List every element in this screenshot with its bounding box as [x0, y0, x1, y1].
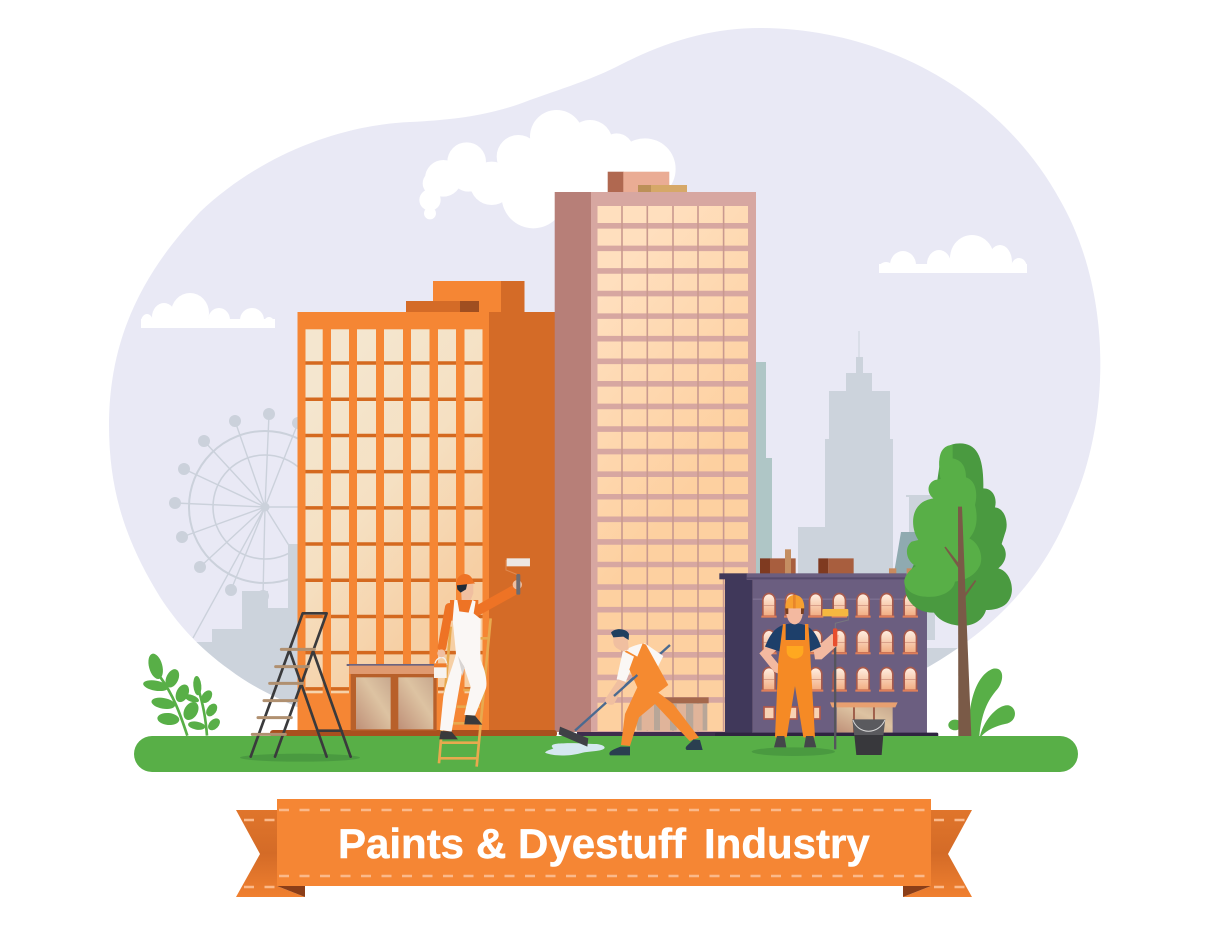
boots — [774, 736, 816, 747]
broom hand overlap handle — [614, 675, 637, 696]
background blob — [109, 28, 1100, 707]
purple building — [715, 549, 938, 737]
building: low grey right — [927, 648, 958, 668]
windows: orange building — [306, 329, 482, 694]
windows: pink tower — [598, 206, 748, 731]
background city skyline — [169, 331, 1010, 720]
building: teal behind tower — [756, 362, 772, 574]
pocket — [787, 646, 803, 659]
ribbon left tail — [236, 810, 305, 897]
tree foliage light — [904, 445, 981, 597]
green ground — [134, 736, 1078, 772]
arched windows — [761, 593, 918, 719]
orange shirt and sleeves — [442, 591, 513, 647]
worker with paint roller and bucket — [752, 595, 885, 756]
cloud: smoke from tower — [419, 110, 676, 228]
pink tower — [555, 172, 756, 732]
white overalls — [440, 600, 486, 732]
banner title: & — [476, 820, 506, 867]
head — [611, 629, 629, 651]
hands — [437, 580, 522, 657]
skyscraper: grey silhouette — [798, 331, 893, 600]
plant: left — [142, 652, 222, 736]
tree trunk — [944, 507, 976, 736]
roller pole — [822, 609, 848, 749]
building: grey block right — [906, 495, 935, 640]
overalls — [621, 643, 699, 746]
stepladder — [240, 613, 360, 762]
banner title: Paints — [338, 820, 464, 867]
forearm — [605, 679, 626, 705]
plant: by tree — [948, 668, 1015, 736]
banner title: Industry — [704, 820, 870, 867]
shoes — [609, 739, 703, 755]
arms — [759, 634, 839, 676]
shirt — [617, 643, 663, 682]
orange building — [298, 281, 557, 732]
bucket — [434, 657, 447, 678]
building: teal right — [894, 532, 918, 575]
broom — [559, 645, 670, 747]
t-shirt — [765, 623, 821, 652]
ribbon right tail — [903, 810, 972, 897]
puddle — [545, 743, 605, 755]
tree foliage dark — [905, 443, 1012, 626]
head — [456, 574, 475, 600]
shoes — [439, 715, 482, 739]
ladder — [439, 618, 491, 767]
ribbon main band — [277, 799, 931, 886]
ribbon banner — [236, 799, 972, 897]
ribbon folds — [277, 886, 931, 897]
bucket — [852, 719, 885, 755]
painter on ladder — [434, 558, 530, 767]
shop front — [347, 664, 437, 731]
overalls — [775, 624, 815, 737]
door with awning — [830, 702, 898, 733]
head — [785, 595, 804, 624]
cloud: left — [141, 293, 275, 328]
trouser fold — [458, 656, 465, 676]
cloud: right — [879, 235, 1027, 273]
bench and radiator at tower base — [637, 697, 709, 731]
building: stepped grey left — [196, 544, 298, 707]
red roller grip — [833, 628, 837, 646]
banner title: Dyestuff — [518, 820, 687, 867]
worker with broom — [545, 629, 703, 755]
tree with plant — [904, 443, 1015, 736]
ferris wheel — [169, 408, 298, 638]
base strips under buildings — [270, 730, 557, 737]
roller — [506, 558, 530, 595]
illustration: paints and dyestuff industry scene — [109, 28, 1100, 897]
